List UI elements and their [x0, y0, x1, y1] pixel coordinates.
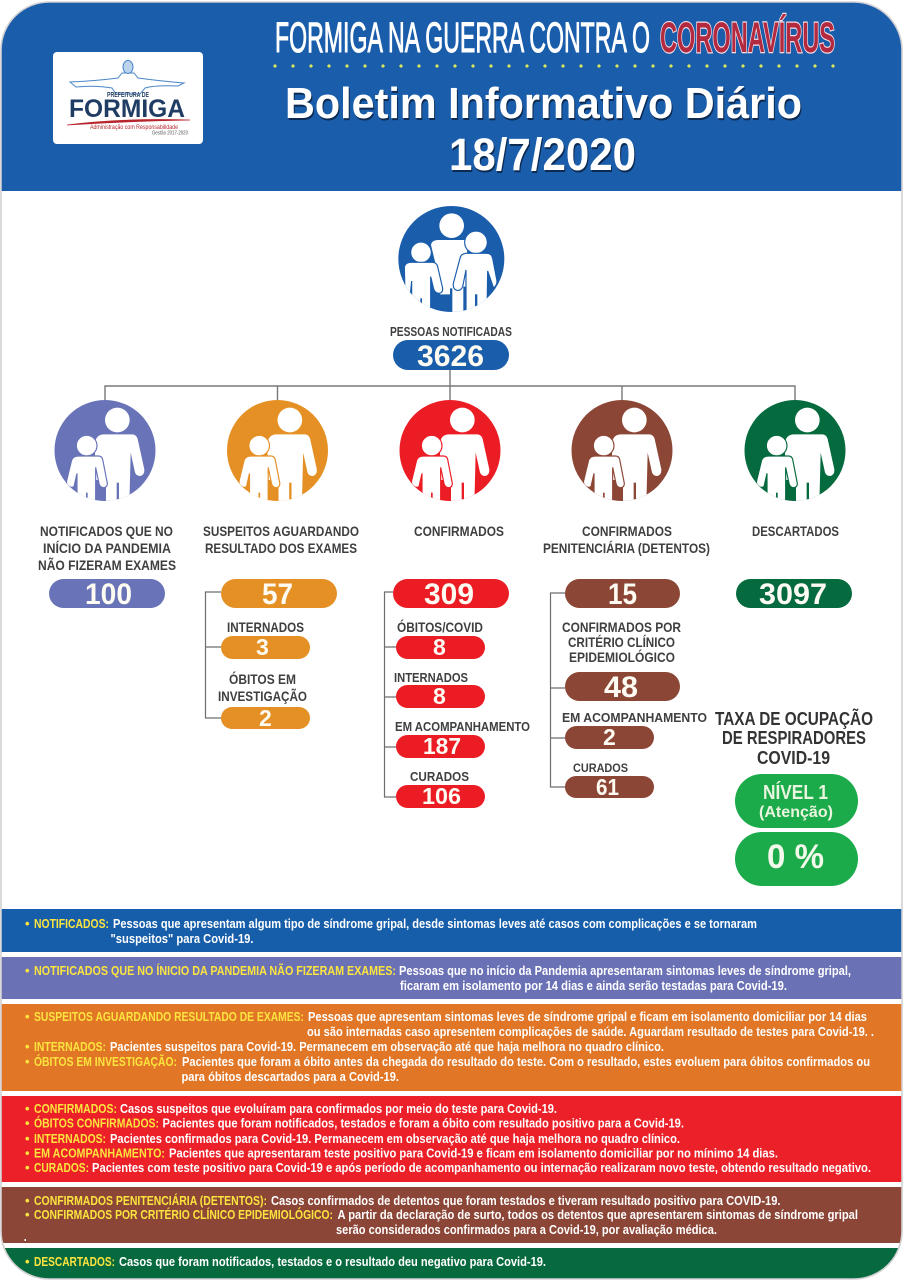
legend: penitenciária: CONFIRMADOS POR CRITÉRIO CLÍNICO EPIDEMIOLÓGICO:	[34, 1207, 333, 1222]
label: pessoas notificadas: PESSOAS NOTIFICADAS	[390, 325, 512, 339]
pill: 61	[565, 774, 654, 800]
heading: taxa de ocupação: DE RESPIRADORES	[722, 728, 866, 748]
pill: 8 internados: 8	[433, 683, 446, 709]
column heading: CONFIRMADOS	[414, 523, 504, 539]
dotted divider	[275, 64, 835, 68]
legend: penitenciária	[0, 1187, 903, 1243]
logo: Prefeitura de Formiga: Gestão 2017-2020	[152, 130, 188, 136]
pill: 3097: 3097	[759, 578, 827, 611]
column heading: RESULTADO DOS EXAMES	[205, 540, 357, 556]
heading: boletim: Boletim Informativo Diário	[285, 79, 802, 128]
pill: 8 óbitos	[396, 636, 485, 659]
legend: confirmados: •	[25, 1146, 30, 1160]
label: em acompanhamento: EM ACOMPANHAMENTO	[562, 711, 707, 725]
pill: 187: 187	[423, 733, 461, 759]
icon: family, pessoas notificadas	[398, 206, 504, 315]
pill: nível 1: (Atenção)	[759, 804, 833, 821]
label: critério clínico	[562, 619, 681, 665]
legend: confirmados: Pacientes que apresentaram teste positivo para Covid-19 e ficam em isolamento domiciliar por no mínimo 14 dias.	[169, 1146, 778, 1160]
label: critério clínico: CONFIRMADOS POR	[562, 619, 681, 635]
legend: confirmados: •	[25, 1160, 30, 1175]
pill: 57: 57	[262, 578, 293, 611]
pill: 2: 2	[603, 724, 616, 750]
legend: suspeitos: •	[25, 1039, 30, 1054]
pill: 48: 48	[604, 671, 638, 704]
legend: confirmados: Pacientes que foram notificados, testados e foram a óbito com resultado positivo para a Covid-19.	[162, 1116, 684, 1130]
legend: penitenciária: Casos confirmados de detentos que foram testados e tiveram resultado positivo para COVID-19.	[271, 1194, 780, 1208]
legend: notificados: NOTIFICADOS:	[34, 916, 109, 931]
pill: 3626	[393, 340, 509, 373]
pill: 100: 100	[85, 578, 132, 611]
column heading	[543, 523, 710, 556]
legend: penitenciária: •	[25, 1207, 30, 1222]
icon: family brown	[571, 400, 672, 505]
pill: 3626: 3626	[417, 340, 484, 373]
pill: nível 1	[735, 774, 858, 828]
label: óbitos em investigação: ÓBITOS EM	[229, 670, 296, 687]
column heading	[203, 526, 358, 553]
column heading: INÍCIO DA PANDEMIA	[43, 540, 171, 556]
legend: descartados: DESCARTADOS:	[34, 1254, 115, 1269]
label: curados: CURADOS	[573, 761, 628, 775]
legend: confirmados: •	[25, 1116, 30, 1130]
legend: suspeitos: •	[25, 1054, 30, 1069]
pill: 8 internados	[396, 685, 485, 708]
bracket	[550, 593, 565, 787]
heading: date: 18/7/2020	[449, 129, 636, 180]
label: critério clínico: CRITÉRIO CLÍNICO	[568, 634, 675, 650]
legend: confirmados: Pacientes confirmados para Covid-19. Permanecem em observação até que haja melhora no quadro clínico.	[110, 1132, 680, 1146]
legend: notificados sem exames: NOTIFICADOS QUE NO ÍNICIO DA PANDEMIA NÃO FIZERAM EXAMES:	[34, 963, 396, 978]
column: suspeitos	[203, 400, 359, 731]
legend: notificados sem exames	[0, 957, 903, 999]
legend: penitenciária: CONFIRMADOS PENITENCIÁRIA (DETENTOS):	[34, 1193, 267, 1208]
logo: Prefeitura de Formiga: Administração com Responsabilidade	[90, 124, 178, 131]
pill: 3: 3	[256, 634, 269, 660]
legend: penitenciária: •	[25, 1193, 30, 1208]
pill: 0 %: 0 %	[767, 838, 824, 876]
legend: suspeitos: •	[25, 1009, 30, 1024]
legend: suspeitos: para óbitos descartados para a Covid-19.	[182, 1070, 399, 1084]
legend: suspeitos: Pacientes suspeitos para Covid-19. Permanecem em observação até que haja melhora no quadro clínico.	[110, 1040, 664, 1054]
label: óbitos em investigação: INVESTIGAÇÃO	[218, 687, 307, 704]
legend: notificados: Pessoas que apresentam algum tipo de síndrome gripal, desde sintomas leves até casos com complicações e se tornaram	[113, 917, 757, 931]
icon: family orange	[227, 400, 328, 505]
pill: 15: 15	[608, 578, 637, 611]
legend: descartados: Casos que foram notificados, testados e o resultado deu negativo para Covid-19.	[119, 1255, 546, 1269]
legend: notificados sem exames: •	[25, 963, 30, 978]
legend: confirmados: EM ACOMPANHAMENTO:	[34, 1146, 165, 1160]
icon: family green	[744, 400, 845, 505]
label: óbitos em investigação	[218, 670, 307, 704]
column heading: NOTIFICADOS QUE NO	[40, 523, 173, 539]
pill: 106: 106	[422, 783, 461, 809]
legend: notificados sem exames: Pessoas que no início da Pandemia apresentaram sintomas leves de síndrome gripal,	[399, 964, 851, 978]
legend: notificados	[0, 909, 903, 952]
pill: 3	[221, 636, 310, 659]
column heading: NÃO FIZERAM EXAMES	[38, 556, 176, 573]
logo: Prefeitura de Formiga	[53, 52, 203, 144]
heading: taxa de ocupação: TAXA DE OCUPAÇÃO	[715, 708, 873, 729]
column: confirmados	[384, 400, 530, 809]
legend: suspeitos: SUSPEITOS AGUARDANDO RESULTADO DE EXAMES:	[34, 1009, 304, 1024]
column: penitenciária	[543, 400, 710, 800]
pill: 2	[221, 707, 310, 729]
connector tree	[105, 370, 795, 400]
column heading: DESCARTADOS	[752, 523, 839, 539]
pill: 2: 2	[259, 705, 272, 731]
pill: 61: 61	[596, 774, 619, 800]
column heading	[38, 526, 176, 570]
legend: confirmados: CURADOS:	[34, 1160, 89, 1175]
legend: confirmados: Casos suspeitos que evoluíram para confirmados por meio do teste para Covid-19.	[120, 1102, 557, 1116]
legend: notificados sem exames: ficaram em isolamento por 14 dias e ainda serão testadas para Covid-19.	[400, 979, 787, 993]
heading: taxa de ocupação: COVID-19	[757, 748, 830, 768]
legend: notificados: "suspeitos" para Covid-19.	[110, 932, 254, 946]
icon: family red	[399, 400, 500, 505]
legend: confirmados: CONFIRMADOS:	[34, 1101, 117, 1116]
pill: 15	[565, 578, 680, 611]
column heading: CONFIRMADOS	[582, 523, 672, 539]
label: óbitos/covid: ÓBITOS/COVID	[397, 618, 483, 635]
pill: 8 óbitos: 8	[433, 634, 446, 660]
bracket	[206, 592, 221, 718]
logo: Prefeitura de Formiga: PREFEITURA DE	[107, 92, 149, 99]
pill: 0 %	[735, 832, 858, 886]
legend: suspeitos: INTERNADOS:	[34, 1039, 106, 1054]
legend: suspeitos: ÓBITOS EM INVESTIGAÇÃO:	[34, 1054, 177, 1069]
pill: 187	[396, 735, 485, 758]
logo: Prefeitura de Formiga: FORMIGA	[69, 95, 185, 123]
pill: 48	[565, 671, 680, 704]
column heading: PENITENCIÁRIA (DETENTOS)	[543, 540, 710, 556]
legend: notificados: •	[25, 916, 30, 931]
pill: 309	[393, 579, 509, 608]
bracket	[384, 592, 396, 797]
pill: 100	[49, 579, 165, 608]
column: notificados sem exames	[38, 400, 176, 611]
legend: descartados	[0, 1248, 903, 1280]
pill: 57	[221, 579, 337, 608]
header band	[0, 0, 903, 191]
label: internados: INTERNADOS	[227, 619, 304, 635]
column heading: SUSPEITOS AGUARDANDO	[203, 523, 359, 539]
legend: confirmados: •	[25, 1101, 30, 1116]
legend: confirmados: ÓBITOS CONFIRMADOS:	[34, 1116, 159, 1130]
pill: 106	[396, 785, 485, 808]
panel: taxa de ocupação	[715, 708, 873, 886]
label: curados: CURADOS	[410, 770, 469, 784]
legend: penitenciária: serão considerados confirmados para a Covid-19, por avaliação médica.	[336, 1223, 717, 1237]
legend: descartados: •	[25, 1254, 30, 1269]
pill: 2	[565, 724, 654, 750]
icon: family purple	[54, 400, 155, 505]
pill: 309: 309	[424, 578, 474, 611]
icon: Christ statue	[70, 60, 184, 94]
pill: 3097	[736, 578, 852, 611]
label: em acompanhamento: EM ACOMPANHAMENTO	[395, 720, 530, 734]
legend: confirmados: INTERNADOS:	[34, 1131, 106, 1146]
legend: confirmados	[0, 1096, 903, 1182]
heading: taxa de ocupação	[715, 708, 873, 768]
column: descartados	[736, 400, 852, 611]
label: critério clínico: EPIDEMIOLÓGICO	[569, 648, 675, 665]
legend: suspeitos	[0, 1004, 903, 1091]
label: internados: INTERNADOS	[394, 671, 468, 685]
pill: nível 1: NÍVEL 1	[763, 781, 828, 804]
legend: confirmados: •	[25, 1131, 30, 1146]
